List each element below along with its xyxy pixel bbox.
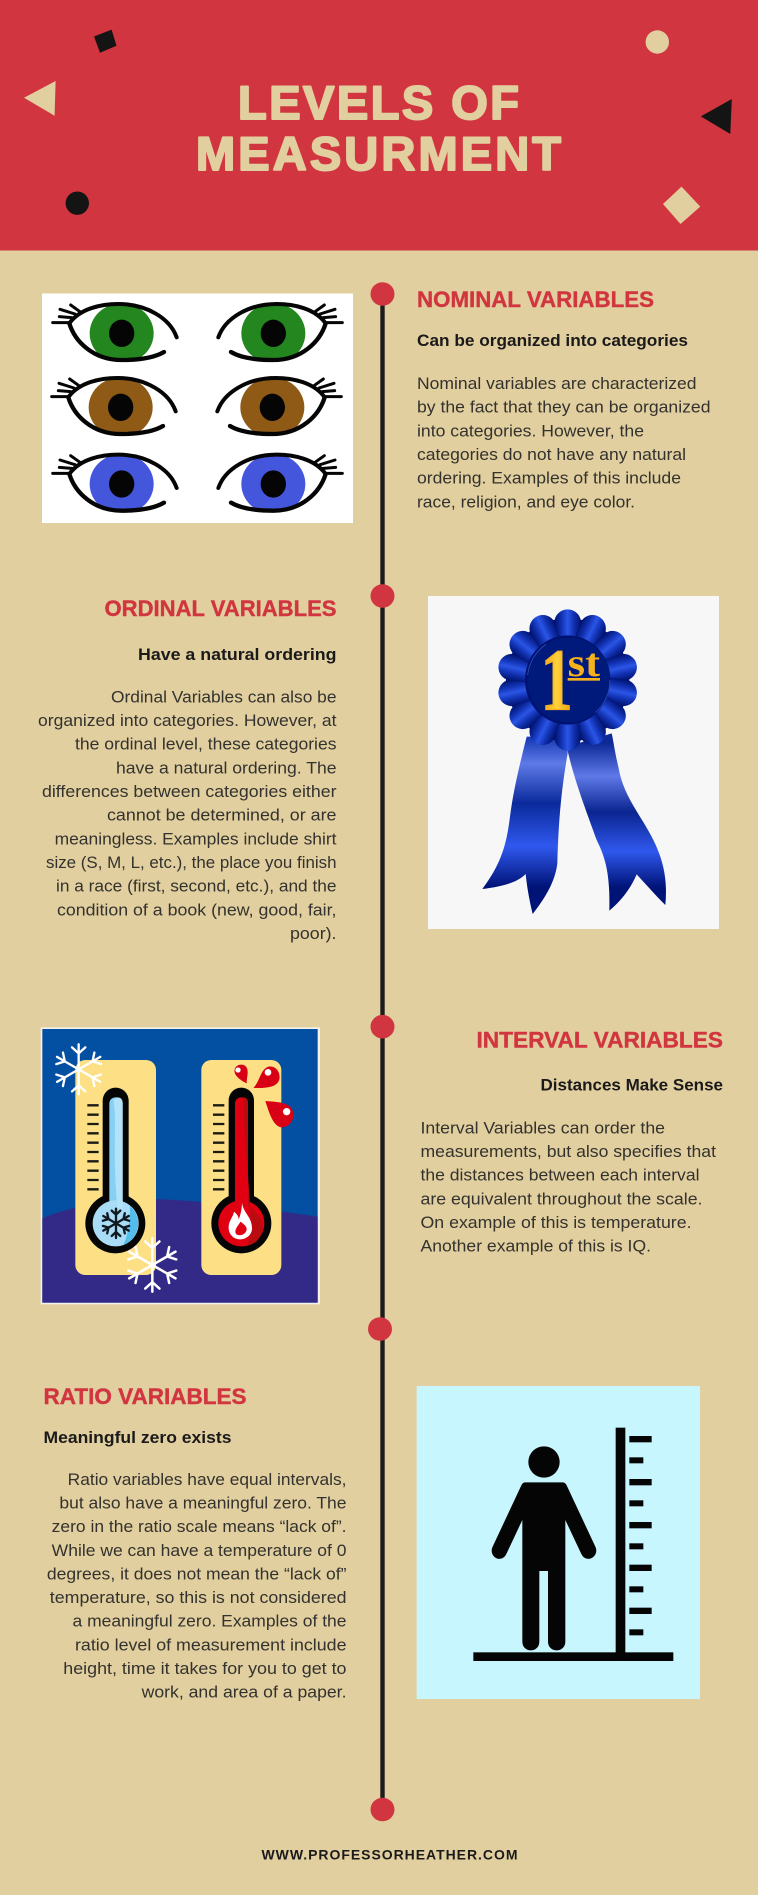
icon: black circle bbox=[66, 192, 89, 215]
text block: ratio: zero in the ratio scale means “lack of”. bbox=[52, 1517, 346, 1536]
text block: nominal: by the fact that they can be organized bbox=[417, 398, 710, 417]
label: 1st: st bbox=[568, 640, 600, 685]
icon: black diamond bbox=[94, 30, 116, 53]
text block: ordinal: condition of a book (new, good, fair, bbox=[57, 900, 336, 919]
icon: white snowflake top bbox=[54, 1044, 104, 1094]
timeline dot: interval bbox=[370, 1015, 394, 1038]
panel: interval variables bbox=[420, 1028, 723, 1256]
subheading: nominal: Can be organized into categories bbox=[417, 331, 688, 350]
icon: flame bbox=[229, 1203, 252, 1239]
yellow panels bbox=[75, 1060, 156, 1275]
text block: interval: On example of this is temperature. bbox=[420, 1213, 692, 1232]
icon: cream triangle bbox=[24, 81, 56, 116]
ribbon tail right bbox=[567, 733, 666, 911]
text block: ordinal: cannot be determined, or are bbox=[107, 806, 336, 825]
text block: ordinal: meaningless. Examples include shirt bbox=[55, 829, 337, 848]
text block: ordinal: in a race (first, second, etc.), and the bbox=[56, 877, 336, 896]
icon: white snowflake bottom bbox=[126, 1238, 179, 1292]
panel: ordinal variables bbox=[38, 596, 337, 943]
icon: dark snowflake bbox=[101, 1209, 131, 1238]
text block: nominal: categories do not have any natural bbox=[417, 445, 686, 464]
text block: ratio: While we can have a temperature of 0 bbox=[52, 1541, 346, 1560]
image: hot and cold thermometers bbox=[41, 1027, 320, 1304]
text block: nominal: race, religion, and eye color. bbox=[417, 492, 635, 511]
hot thermometer bbox=[211, 1088, 271, 1253]
text block: ratio: work, and area of a paper. bbox=[141, 1683, 346, 1702]
image: first place ribbon bbox=[428, 596, 719, 929]
panel: ratio variables bbox=[44, 1384, 347, 1702]
timeline dot: ratio bbox=[368, 1317, 392, 1341]
heading: ordinal: ORDINAL VARIABLES bbox=[104, 596, 336, 621]
blue eyes bbox=[53, 454, 342, 514]
text block: interval: Another example of this is IQ. bbox=[420, 1237, 651, 1256]
heading: ratio: RATIO VARIABLES bbox=[44, 1384, 246, 1409]
icon: cream circle bbox=[646, 30, 669, 54]
heading: interval: INTERVAL VARIABLES bbox=[476, 1028, 723, 1053]
text block: ratio: height, time it takes for you to get to bbox=[63, 1659, 347, 1678]
label: 1st: 1 bbox=[541, 631, 573, 728]
subheading: interval: Distances Make Sense bbox=[540, 1076, 723, 1095]
text block: ordinal: size (S, M, L, etc.), the place you finish bbox=[46, 853, 336, 872]
title: LEVELS OF bbox=[238, 76, 519, 129]
image: person beside height scale bbox=[417, 1386, 700, 1699]
rosette bbox=[496, 609, 640, 751]
text block: ordinal: differences between categories either bbox=[42, 782, 337, 801]
text block: ordinal: organized into categories. However, at bbox=[38, 711, 337, 730]
text block: ratio: but also have a meaningful zero. The bbox=[59, 1494, 346, 1512]
green eyes bbox=[53, 303, 342, 363]
timeline dot: end bbox=[370, 1798, 394, 1821]
text block: interval: the distances between each interval bbox=[420, 1166, 700, 1185]
text block: ratio bbox=[47, 1470, 347, 1702]
text block: interval bbox=[420, 1118, 716, 1256]
text block: ratio: degrees, it does not mean the “lack of” bbox=[47, 1564, 347, 1583]
text block: ordinal: poor). bbox=[290, 924, 336, 943]
text block: interval: are equivalent throughout the scale. bbox=[420, 1189, 702, 1208]
ribbon tail left bbox=[482, 737, 568, 914]
timeline bbox=[368, 282, 394, 1821]
icon: red droplets bbox=[234, 1065, 293, 1127]
cold thermometer bbox=[85, 1088, 145, 1253]
brown eyes bbox=[52, 377, 341, 437]
person bbox=[492, 1446, 596, 1650]
text block: ratio: ratio level of measurement include bbox=[75, 1635, 346, 1654]
text block: nominal: ordering. Examples of this include bbox=[417, 469, 681, 488]
subheading: ratio: Meaningful zero exists bbox=[44, 1428, 231, 1447]
text block: interval: Interval Variables can order the bbox=[420, 1118, 665, 1137]
timeline dot: ordinal bbox=[370, 584, 394, 608]
icon: black triangle bbox=[701, 99, 732, 134]
text block: ordinal bbox=[38, 687, 337, 943]
text block: ordinal: have a natural ordering. The bbox=[116, 758, 336, 777]
timeline dot: nominal bbox=[370, 282, 394, 306]
header banner bbox=[0, 0, 758, 250]
text block: nominal: Nominal variables are characterized bbox=[417, 374, 696, 393]
text block: ordinal: Ordinal Variables can also be bbox=[111, 687, 336, 706]
height scale bbox=[473, 1428, 673, 1661]
heading: nominal: NOMINAL VARIABLES bbox=[417, 287, 654, 312]
text block: ratio: Ratio variables have equal intervals, bbox=[68, 1470, 346, 1489]
text block: ratio: a meaningful zero. Examples of the bbox=[72, 1612, 346, 1631]
panel: nominal variables bbox=[417, 287, 710, 511]
purple hill bbox=[42, 1199, 318, 1303]
footer url: WWW.PROFESSORHEATHER.COM bbox=[262, 1847, 518, 1863]
subheading: ordinal: Have a natural ordering bbox=[138, 645, 336, 664]
image: eyes in three colours bbox=[42, 294, 353, 523]
icon: cream diamond bbox=[663, 187, 700, 224]
text block: interval: measurements, but also specifies that bbox=[420, 1142, 716, 1161]
text block: ordinal: the ordinal level, these categories bbox=[75, 735, 336, 754]
text block: nominal bbox=[417, 374, 710, 511]
title bbox=[196, 76, 561, 180]
text block: nominal: into categories. However, the bbox=[417, 421, 644, 440]
title: MEASURMENT bbox=[196, 127, 561, 180]
text block: ratio: temperature, so this is not considered bbox=[50, 1588, 347, 1607]
